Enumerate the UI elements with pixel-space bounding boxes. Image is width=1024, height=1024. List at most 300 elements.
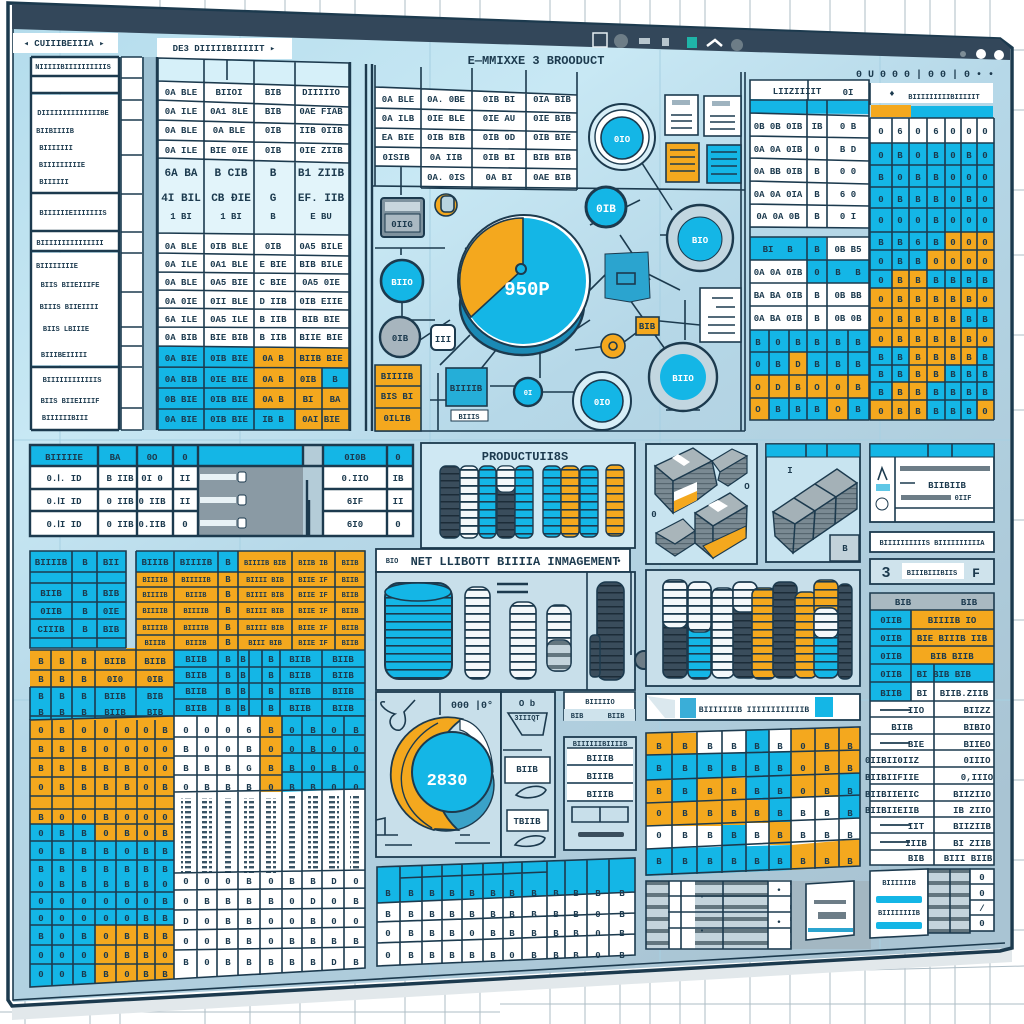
table: top-left listing: CB ÐIE	[211, 193, 251, 205]
table: top-left listing: 0IB EIIE	[299, 297, 343, 307]
icon: gear	[601, 334, 625, 358]
label: search box: BIIIBIIIBIIS	[907, 570, 957, 578]
table: top-centre listing: 0IB BIE	[533, 133, 571, 143]
grid: left upper blue: BII	[103, 558, 119, 568]
table: top-left listing: B IIB	[259, 315, 287, 325]
table: slider row: 0I 0	[141, 474, 163, 484]
grid: orange block: BIIIB	[144, 640, 166, 648]
table: top-left listing: 0IE ZIIB	[299, 146, 343, 156]
panel: small form bottom: BIIIB	[586, 790, 614, 800]
table: top-left listing: 0A5 ILE	[210, 315, 248, 325]
tabs	[13, 33, 292, 59]
grid: orange block: BIIB	[144, 657, 166, 667]
icon: blue cube	[605, 252, 650, 302]
grid: left upper blue: B	[82, 607, 88, 617]
table: top-centre listing: 0AE BIB	[533, 173, 571, 183]
icon: card two: TBIIB	[513, 817, 541, 827]
table: slider row: II	[180, 474, 190, 484]
table: top-centre listing: 0A ILB	[382, 114, 415, 124]
panel: top-right table: 0 0	[840, 167, 856, 177]
panel: top-right table: 0A 0A 0IB	[754, 145, 803, 155]
table: top-left listing: BIE BIB	[210, 333, 248, 343]
table: top-centre listing: 0A. 0IS	[427, 173, 465, 183]
table: top-left listing: DIIIIIO	[302, 88, 340, 98]
panel: top-right heat grid: 0BBBBB0	[878, 335, 988, 345]
card: bottom right icons: 0	[979, 889, 985, 899]
grid: orange block: B	[59, 657, 65, 667]
icon: card one	[505, 757, 550, 798]
grid: orange block: B	[268, 687, 274, 697]
panel: top-right heat grid: B0BB000	[878, 173, 988, 183]
grid: orange block: B	[225, 655, 231, 665]
grid: centre heat table: BBBBBBBBB	[656, 857, 853, 867]
panel: top-right table: 0	[814, 145, 820, 155]
table: right ledger: 0IIB	[880, 670, 902, 680]
grid: orange block: BIIE IF	[298, 592, 328, 600]
panel: top-right table: BIIIIIIIIIBIIIIIT	[908, 94, 980, 102]
table: top-left listing: 0IB	[265, 242, 282, 252]
table: right ledger: BI ZIIB	[953, 839, 991, 849]
table: top-centre listing: 0IB BI	[483, 95, 515, 105]
table: top-left listing: 4I BIL	[161, 193, 201, 205]
grid: orange block: B	[225, 704, 231, 714]
panel: top-right table: B	[814, 291, 820, 301]
table: slider row: 0	[395, 520, 401, 530]
icon: document top right	[704, 96, 741, 136]
table: top-left listing: E BU	[310, 212, 332, 222]
table: slider row: B IIB	[106, 474, 134, 484]
grid: left upper blue: BIIB	[40, 589, 62, 599]
table: top-left listing: 6A ILE	[165, 315, 198, 325]
card: bottom right icons: /	[979, 904, 985, 914]
table: top-left listing: BIB BIE	[302, 315, 340, 325]
table: right ledger: BIIZIIO	[953, 790, 991, 800]
node: right circle	[667, 205, 733, 271]
table: right ledger: BIIB.ZIIB	[940, 689, 989, 699]
grid: left upper blue: B	[82, 589, 88, 599]
front upper stack	[655, 448, 717, 513]
grid: orange block: BIIIIB	[183, 608, 209, 616]
panel: top-right heat grid: 0BBBBB0	[878, 407, 988, 417]
toolbar icons	[593, 33, 1004, 60]
node: lower right circle: BIIO	[672, 374, 694, 384]
table: top-centre listing: 0IB 0D	[483, 133, 516, 143]
toolbar readouts: 0 U 0 0 0 | 0 0 | 0 • •	[856, 69, 994, 81]
table: right ledger: BIIEO	[963, 740, 991, 750]
table: top-left listing: IB B	[262, 415, 284, 425]
grid: lower-left heat table: 0BBB0BB	[38, 847, 168, 857]
table: top-centre listing: 0A BI	[485, 173, 513, 183]
panel: receipts	[501, 692, 555, 857]
grid: orange block: B	[225, 575, 231, 585]
table: top-left listing: B IIB	[259, 333, 287, 343]
card: bottom right icons	[970, 869, 994, 931]
grid: orange block: BIIII BIB	[246, 577, 285, 585]
grid: orange block: B	[268, 704, 274, 714]
table: top-left listing: BIIB BIE	[299, 354, 343, 364]
table: top-left listing: BIIE BIE	[299, 333, 343, 343]
card: bottom right icons: 0	[979, 873, 985, 883]
grid: orange block: BIIB IB	[298, 560, 329, 568]
table: top-left listing: 0AE FIAB	[299, 107, 343, 117]
table: top-left listing: 0A5 BIE	[210, 278, 248, 288]
table: right ledger: BIIB	[891, 723, 913, 733]
grid: orange block: BIIE IF	[298, 640, 328, 648]
table: slider row: 0O	[147, 453, 158, 463]
table: top-left listing: IIB 0IIB	[299, 126, 343, 136]
dense text columns	[181, 796, 360, 873]
panel: stacks illustration: 0	[651, 510, 657, 520]
table: top-left listing: 0A ILE	[165, 107, 198, 117]
card: bottom right form	[870, 869, 970, 938]
table: top-left listing: BIB	[265, 107, 282, 117]
table: right ledger: BIIBIIFIIE	[865, 773, 920, 783]
panel: left sidebar: BIIIIIIIIIIIIIII	[36, 240, 104, 248]
table: slider row: 0.ⅠI ID	[46, 519, 82, 530]
node: small circle: 0IB	[596, 204, 616, 216]
table: top-centre listing: 0A IIB	[430, 153, 463, 163]
panel: info card	[870, 444, 994, 522]
grid: orange block: B	[59, 708, 65, 718]
table: right ledger: BI	[917, 689, 927, 699]
node: top circle: 0IO	[614, 135, 631, 145]
icon: small tag	[431, 325, 455, 350]
grid: lower-left heat table: 000000B	[38, 897, 168, 907]
table: top-left listing: 0A5 BILE	[299, 242, 343, 252]
panel: top-right table: ♦	[889, 89, 895, 99]
grid: orange block: BIIB	[185, 655, 207, 665]
grid: orange block: BIIE IF	[298, 625, 328, 633]
panel: top-right table: 0A BA 0IB	[754, 314, 803, 324]
grid: lower-left heat table: 00BB0BB	[38, 970, 168, 980]
node: lower circle: 0IO	[594, 398, 611, 408]
table: right ledger: BIIIIB IO	[928, 616, 977, 626]
panel: left sidebar: BIIS LBIIIE	[43, 326, 89, 334]
panel: top-right heat grid: BBBBBBB	[878, 388, 988, 398]
table: top-left listing: E BIE	[259, 260, 287, 270]
panel: top-right table: IB	[812, 122, 823, 132]
table: top-left listing: 0IE BIE	[210, 375, 248, 385]
table: slider row: BA	[110, 453, 121, 463]
panel: top-right table: ODBO0B	[755, 383, 861, 393]
grid: lower-left heat table: B00B000	[38, 813, 168, 823]
panel: top-right heat grid: 0B0B0B0	[878, 151, 988, 161]
panel: left sidebar: BIIIIIIIIIE	[39, 162, 85, 170]
table: slider row: 0 IIB	[138, 497, 166, 507]
table: top-left listing: B	[332, 375, 338, 385]
grid: lower-left heat table: 0B0000B0006B0B0B	[38, 726, 359, 736]
table: top-left listing: 0A BIB	[165, 375, 198, 385]
node: lower right circle	[649, 343, 717, 411]
grid: orange block: B	[240, 687, 246, 697]
grid: orange block: BIIIIB	[142, 577, 168, 585]
panel: top-right table: BA BA 0IB	[754, 291, 803, 301]
table: top-left listing: B CIB	[214, 168, 248, 180]
grid: lower-left heat table: 0BBBBB0	[38, 880, 168, 890]
table: bottom centre: BBBBBBBBBBBB	[385, 889, 625, 899]
table: slider row: 0 IIB	[106, 520, 134, 530]
grid: lower-left heat table: 0BB0B0B	[38, 829, 168, 839]
table: right ledger: BI	[917, 670, 927, 680]
table: top-left listing: 6A BA	[164, 168, 198, 180]
table: slider row	[30, 445, 413, 536]
panel: network diagram	[372, 72, 745, 431]
grid: orange block: BIIB	[342, 608, 359, 616]
table: top-left listing: 1 BI	[220, 212, 242, 222]
table: top-centre listing: 0IE BIB	[533, 114, 571, 124]
table: top-left listing: 0IB BLE	[210, 242, 248, 252]
orange stacked box	[375, 365, 421, 431]
grid: orange block: BIIII BIB	[246, 625, 285, 633]
panel: top-right table: 0 B	[840, 122, 857, 132]
table: right ledger: BIIB	[880, 689, 902, 699]
panel: products cylinders	[421, 443, 635, 548]
blue box	[446, 368, 488, 422]
grid: orange block: B	[240, 704, 246, 714]
table: bottom centre: 0BBBBB0BBB0B	[385, 951, 625, 961]
icon: orange note	[666, 143, 699, 182]
grid: orange block: B	[225, 623, 231, 633]
label: search box	[870, 559, 994, 584]
grid: orange block: BIIIIB	[183, 625, 209, 633]
table: top-left listing: BIE 0IE	[210, 146, 248, 156]
panel: left sidebar: BIIIIIIBIII	[42, 415, 88, 423]
panel: left sidebar: BIIBIIIIB	[36, 128, 75, 136]
panel: small form bottom: BIIIIIIBIIIIB	[573, 741, 628, 749]
table: top-left listing: 0A BLE	[165, 126, 198, 136]
small lower block	[656, 519, 695, 556]
table: right ledger: BIII BIIB	[944, 854, 993, 864]
table: top-left listing: 0A5 0IE	[302, 278, 340, 288]
orange tag: BIB	[639, 322, 656, 332]
icon: card two	[507, 810, 548, 846]
table: bottom centre	[377, 858, 635, 966]
panel: top-right table: BI	[763, 245, 773, 255]
grid: centre heat table	[646, 727, 860, 876]
grid: orange block: BIIB	[104, 657, 126, 667]
table: top-left listing: 0AI BIE	[302, 415, 340, 425]
table: slider row: 0	[182, 520, 188, 530]
panel: database cylinders	[376, 572, 635, 690]
panel: top-right table: B	[814, 167, 820, 177]
panel drop shadow	[12, 950, 1012, 1020]
panel: top-right table: B	[814, 212, 820, 222]
table: bottom grey ledger: •	[700, 894, 704, 902]
table: slider row: 0.IIO	[341, 474, 369, 484]
grid: orange block: B	[59, 675, 65, 685]
table: top-left listing: BIB	[265, 88, 282, 98]
grid: orange block: B	[38, 675, 44, 685]
orange tag	[636, 317, 659, 335]
panel header: net list: •	[616, 557, 622, 567]
grid: orange block: B	[38, 657, 44, 667]
panel: top-right heat grid: 000B000	[878, 216, 988, 226]
grid: orange block: BIIIB	[185, 640, 207, 648]
grid: left upper blue: B	[82, 558, 88, 568]
panel: top-right table: 0B BB	[834, 291, 862, 301]
panel: left sidebar: BIIIIIII	[39, 145, 73, 153]
table: top-centre listing: BIB BIB	[533, 153, 571, 163]
table: top-left listing: 0IB	[300, 375, 317, 385]
table: top-centre listing: 0A BLE	[382, 95, 415, 105]
table: slider row: 0	[395, 453, 401, 463]
blue box: BIIIIB	[450, 384, 483, 394]
grid: lower-left heat table: 0000BB0	[38, 951, 168, 961]
table: top-centre listing: 0IE AU	[483, 114, 515, 124]
panel: left sidebar: DIIIIIIIIIIIIIIBE	[37, 110, 109, 118]
grid: lower-left heat table	[30, 716, 365, 987]
panel: top-right table: 6 0	[840, 190, 856, 200]
grid: orange block: B	[81, 708, 87, 718]
pie chart: 950P	[504, 279, 550, 301]
panel: block illustration: B	[842, 544, 848, 554]
table: bottom grey ledger: •	[776, 886, 782, 896]
blue box: BIIIS	[458, 414, 480, 422]
icon: lock	[435, 194, 457, 216]
table: right ledger: 0,IIIO	[961, 773, 994, 783]
grid: lower-left heat table: D0BB00B00	[183, 917, 359, 927]
panel: stacked coins chart	[646, 570, 860, 686]
panel: small form bottom	[564, 737, 636, 850]
panel: top-right heat grid: 0BBBBBB	[878, 276, 988, 286]
grid: orange block: BIB	[147, 708, 164, 718]
grid: orange block: BIIB	[342, 560, 359, 568]
panel: left sidebar: BIIIIIIEIIIIIIIS	[39, 210, 107, 218]
label: sub header	[870, 532, 994, 552]
icon: small tag: III	[435, 335, 451, 345]
table: top-centre listing	[375, 65, 577, 195]
grid: orange block: BIIB	[342, 577, 359, 585]
big lower block	[695, 493, 747, 558]
table: top-centre listing: 0A. 0BE	[427, 95, 465, 105]
tabs: DE3 DIIIIIBIIIIIT ▸	[173, 44, 275, 54]
panel: stacks illustration: O	[744, 482, 750, 492]
grid: centre heat table: 0BBBBBBBB	[656, 831, 853, 841]
card: bottom right form: BIIIIIIB	[882, 880, 917, 888]
grid: centre heat table: BBBBBB0BB	[656, 764, 853, 774]
grid: left upper blue: BIB	[103, 625, 120, 635]
panel: top-right table: 0	[814, 268, 820, 278]
table: top-left listing: 0IB	[265, 146, 282, 156]
grid: orange block: B	[81, 675, 87, 685]
grid: orange block: B	[225, 590, 231, 600]
table: right ledger: IIT	[908, 822, 925, 832]
label: sub header: BIIIIIIIIIIS BIIIIIIIIIIA	[879, 540, 985, 548]
grid: orange block: BIIII BIB	[246, 592, 285, 600]
icon: round badge	[635, 651, 653, 669]
table: top-left listing: 0A B	[262, 395, 284, 405]
table: top-left listing: 0A 0IE	[165, 297, 198, 307]
table: right ledger: 0IIB	[880, 634, 902, 644]
table: right ledger: IB ZIIO	[953, 806, 991, 816]
grid: lower-left heat table: BBB0000B00B00B00	[38, 745, 359, 755]
grid: orange block: BIIB	[289, 655, 311, 665]
table: top-centre listing: 0IB BIB	[427, 133, 465, 143]
panel: top-right table: B	[787, 245, 793, 255]
table: top-centre listing: 0IA BIB	[533, 95, 571, 105]
grid: orange block: BIIB	[185, 687, 207, 697]
grid: orange block: BIIB	[289, 704, 311, 714]
grid: orange block: BIIE IF	[298, 608, 328, 616]
table: slider row: 0 IIB	[106, 497, 134, 507]
panel: top-right table: 0B 0B	[834, 314, 862, 324]
grid: orange block: B	[81, 692, 87, 702]
table: bottom centre: BBBBBBBBBB0B	[385, 910, 625, 920]
table: top-centre listing: 0ISIB	[382, 153, 410, 163]
node: left blue circle: BIIO	[391, 278, 413, 288]
panel: small form top: BIIB	[608, 713, 625, 721]
table: top-left listing: 0A BIB	[165, 333, 198, 343]
table: right ledger: BIB	[908, 854, 925, 864]
table: slider row: II	[180, 497, 190, 507]
grid: centre heat table: BBBBBB0BB	[656, 742, 853, 752]
panel: top-right heat grid	[870, 118, 994, 420]
table: top-left listing: 0A BIE	[165, 415, 198, 425]
table: right ledger	[865, 593, 994, 865]
header bar: grid title: BIIIIIIIB IIIIIIIIIIIIB	[699, 706, 809, 715]
grid: orange block: BIIIIB	[142, 592, 168, 600]
node: small circle	[586, 187, 626, 227]
table: top-left listing: 0A1 BLE	[210, 260, 248, 270]
node: left grey circle	[380, 317, 420, 357]
panel: left sidebar: BIIIIIIIIE	[36, 263, 78, 271]
table: right ledger: 0IIB	[880, 616, 902, 626]
icon: document lower	[700, 288, 741, 342]
grid: orange block: B	[59, 692, 65, 702]
panel: top-right table: B	[835, 268, 841, 278]
panel: top-right table: 0A 0A 0B	[756, 212, 800, 222]
table: top-left listing: 0II BLE	[210, 297, 248, 307]
panel: small form top: BIB	[571, 713, 584, 721]
table: right ledger: IIIB	[905, 839, 927, 849]
table: top-left listing: 0A BLE	[165, 242, 198, 252]
grid: orange block: BIIB	[342, 625, 359, 633]
node: tiny circle	[514, 378, 542, 406]
panel header: net list: NET LLIBOTT BIIIIA INMAGEMENT	[411, 555, 619, 569]
panel: products cylinders: PRODUCTUII8S	[482, 450, 568, 464]
grid: orange block: BIIB	[104, 708, 126, 718]
panel: donut chart: 2830	[427, 772, 467, 791]
table: top-left listing: B	[270, 212, 276, 222]
table: top-left listing: BIIOI	[215, 88, 243, 98]
panel: top-right table: 0B 0B 0IB	[754, 122, 803, 132]
pie chart	[458, 215, 590, 355]
panel: small form top: BIIIIIO	[585, 699, 615, 707]
panel: info card: 0IIF	[955, 495, 971, 503]
grid: orange block: BIIB	[332, 687, 354, 697]
panel: info card: BIIBIIB	[928, 481, 966, 491]
label: search box: F	[972, 566, 980, 581]
panel: donut chart	[376, 692, 501, 857]
table: slider row: IB	[393, 474, 404, 484]
grid: left upper blue: 0IIB	[40, 607, 62, 617]
panel: top-right heat grid: 0BBBBBB	[878, 315, 988, 325]
grid: orange block: BIIB	[185, 671, 207, 681]
grid: left upper blue: 0IE	[103, 607, 120, 617]
icon: document top left	[665, 95, 698, 135]
table: right ledger: IIO	[908, 706, 925, 716]
grid: orange block: B	[38, 692, 44, 702]
icon: server box	[381, 198, 424, 237]
node: left blue circle	[381, 260, 423, 302]
grid: orange block: BIIIIB	[142, 625, 168, 633]
table: right ledger: BIE	[908, 740, 925, 750]
card: bottom white note	[806, 881, 854, 940]
table: top-left listing: 1 BI	[170, 212, 192, 222]
grid: left upper blue: BIIIIB	[35, 558, 68, 568]
panel: top-right table: LIIZIIIIT	[773, 87, 822, 97]
table: right ledger: BIB BIIB	[930, 652, 974, 662]
